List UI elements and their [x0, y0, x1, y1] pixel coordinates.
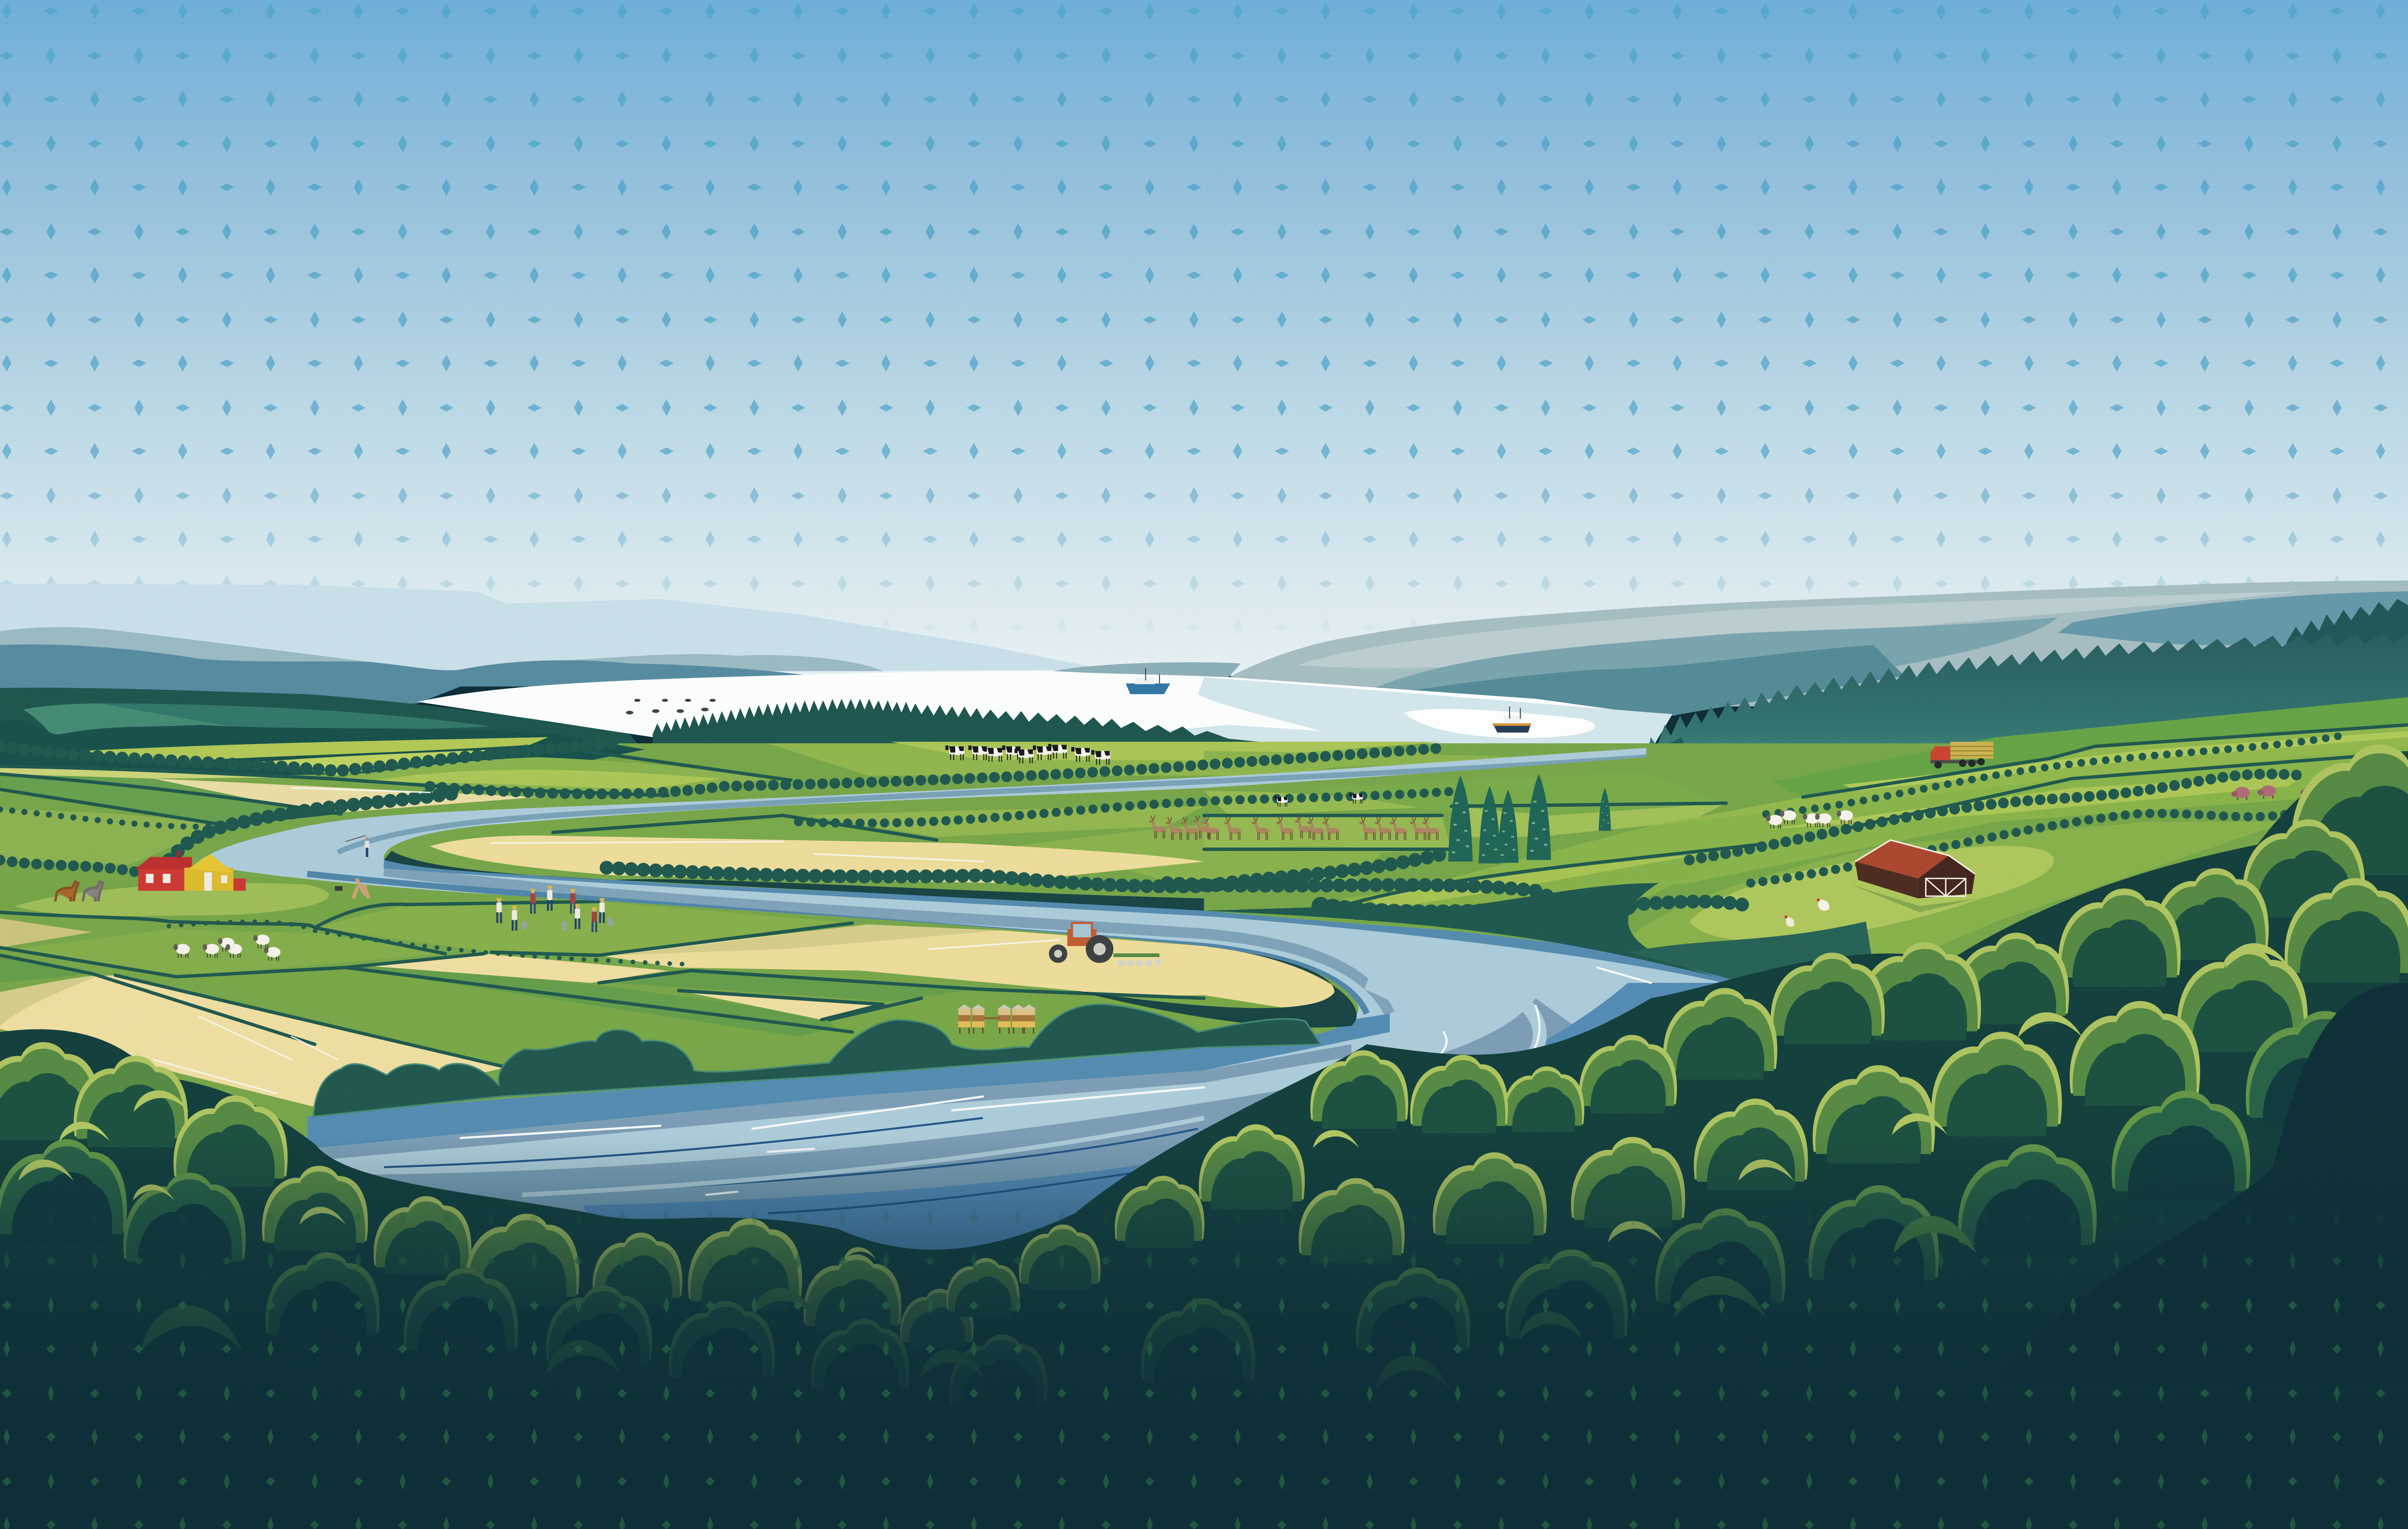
riverside bushes [313, 1004, 1321, 1116]
outer bend blue band [384, 863, 1757, 986]
left clumps rear row [0, 1042, 974, 1347]
upper dark ridge trees [2287, 599, 2408, 660]
hedge: left bend [161, 793, 461, 869]
sand field above the river [430, 835, 1204, 883]
lake white [418, 671, 1659, 768]
grey lower band [315, 998, 1643, 1229]
dog and deer by river [335, 879, 368, 898]
river [153, 737, 1843, 1290]
chickens [1784, 898, 1829, 927]
field sun streaks [153, 788, 1060, 1094]
fishing boat right [1493, 706, 1531, 732]
hedge: far treeline [0, 743, 614, 771]
sheep flock left [173, 935, 281, 961]
lower dark shore slope [1342, 645, 1904, 715]
foliage base mass [0, 752, 2408, 1529]
bottom darkness [0, 1136, 2408, 1444]
deer herd [1149, 815, 1439, 840]
barn [1851, 840, 1978, 912]
left clumps second row [0, 1139, 1047, 1413]
mid reach edge line [307, 874, 1367, 1014]
scalloped bushes by river end [1628, 921, 1874, 986]
forest mass [1646, 633, 2408, 805]
sheep right [1766, 810, 1853, 829]
hedge: tractor field edge [169, 922, 691, 964]
mid reach grey band [384, 871, 1390, 1014]
forest shadow edge [1646, 737, 1812, 805]
inner bend dark bank [384, 851, 1204, 911]
pale hillside [1212, 581, 2408, 706]
horses [55, 881, 103, 901]
fisherman [346, 835, 369, 857]
left dark wooded hill [0, 688, 645, 768]
white glints [461, 967, 1651, 1195]
right clumps rear row [947, 745, 2408, 1317]
mid shadow fold [1342, 617, 2058, 715]
white sandbar [1404, 709, 1595, 738]
hedge: sand field underside [607, 854, 1444, 886]
dairy herd [946, 744, 1111, 765]
bottom dark base [0, 1428, 2408, 1529]
hedgerows [0, 734, 2350, 986]
left field mosaic [0, 870, 1334, 1109]
dark interior shade right [1996, 983, 2408, 1382]
hedge: left field [0, 860, 138, 872]
fishing boat left [1126, 668, 1170, 694]
hedge: above far river [430, 748, 1444, 794]
distant hazy mountains [0, 583, 1106, 676]
back farmland fields [0, 737, 1726, 891]
pale lower streak [522, 1118, 1204, 1195]
ground base [0, 743, 2408, 1281]
right clumps front row [1141, 1011, 2392, 1390]
log truck [1930, 742, 1993, 768]
animals and farm figures [55, 742, 2319, 1094]
barn meadow [1622, 822, 2288, 967]
beehives [957, 1004, 1036, 1033]
hedge: lower valley mass [1204, 883, 1757, 986]
water base [153, 737, 1843, 1290]
lower leaves [141, 1216, 1976, 1389]
right hill strips [1342, 697, 2408, 921]
left hills [0, 627, 883, 722]
upper lower-reach blue band [307, 1014, 1390, 1149]
aquaculture pens [626, 699, 715, 715]
farm workers [497, 886, 613, 932]
teal upland fields [23, 703, 491, 747]
foreground foliage [0, 745, 2408, 1529]
sky diamond pattern [0, 0, 2408, 645]
hedge: middle right [1167, 883, 1751, 906]
right hill [1212, 581, 2408, 715]
far cows [1274, 793, 1363, 807]
hedge: under far river [798, 791, 1459, 823]
far treeline left [0, 720, 645, 783]
right conifer forest [1646, 599, 2408, 805]
river bank around tip [1075, 946, 1357, 1028]
lower diamond pattern [0, 1198, 2408, 1529]
field boundary hedgelines [0, 725, 2408, 1067]
shaded blue slope [2058, 591, 2408, 645]
leaf highlights [18, 943, 2290, 1260]
small distant headland [1053, 662, 1241, 677]
light upper slope [1297, 591, 2304, 668]
sky [0, 0, 2408, 676]
central conifer forest [653, 699, 1275, 752]
right clumps second row [1298, 878, 2408, 1263]
thin grey band [307, 1044, 1351, 1161]
lowest blue band [583, 983, 1757, 1290]
light bend bands [1367, 960, 1540, 1083]
inlet pale water [921, 677, 1672, 763]
pigs [2231, 785, 2319, 800]
blue hill ridge [0, 645, 854, 722]
lower thin streak lines [384, 1118, 1198, 1213]
far reach darker band [338, 757, 1646, 852]
farmhouse [135, 851, 246, 891]
columnar pines [1448, 774, 1611, 864]
pale far hill [0, 627, 883, 706]
tractor [1049, 923, 1162, 966]
